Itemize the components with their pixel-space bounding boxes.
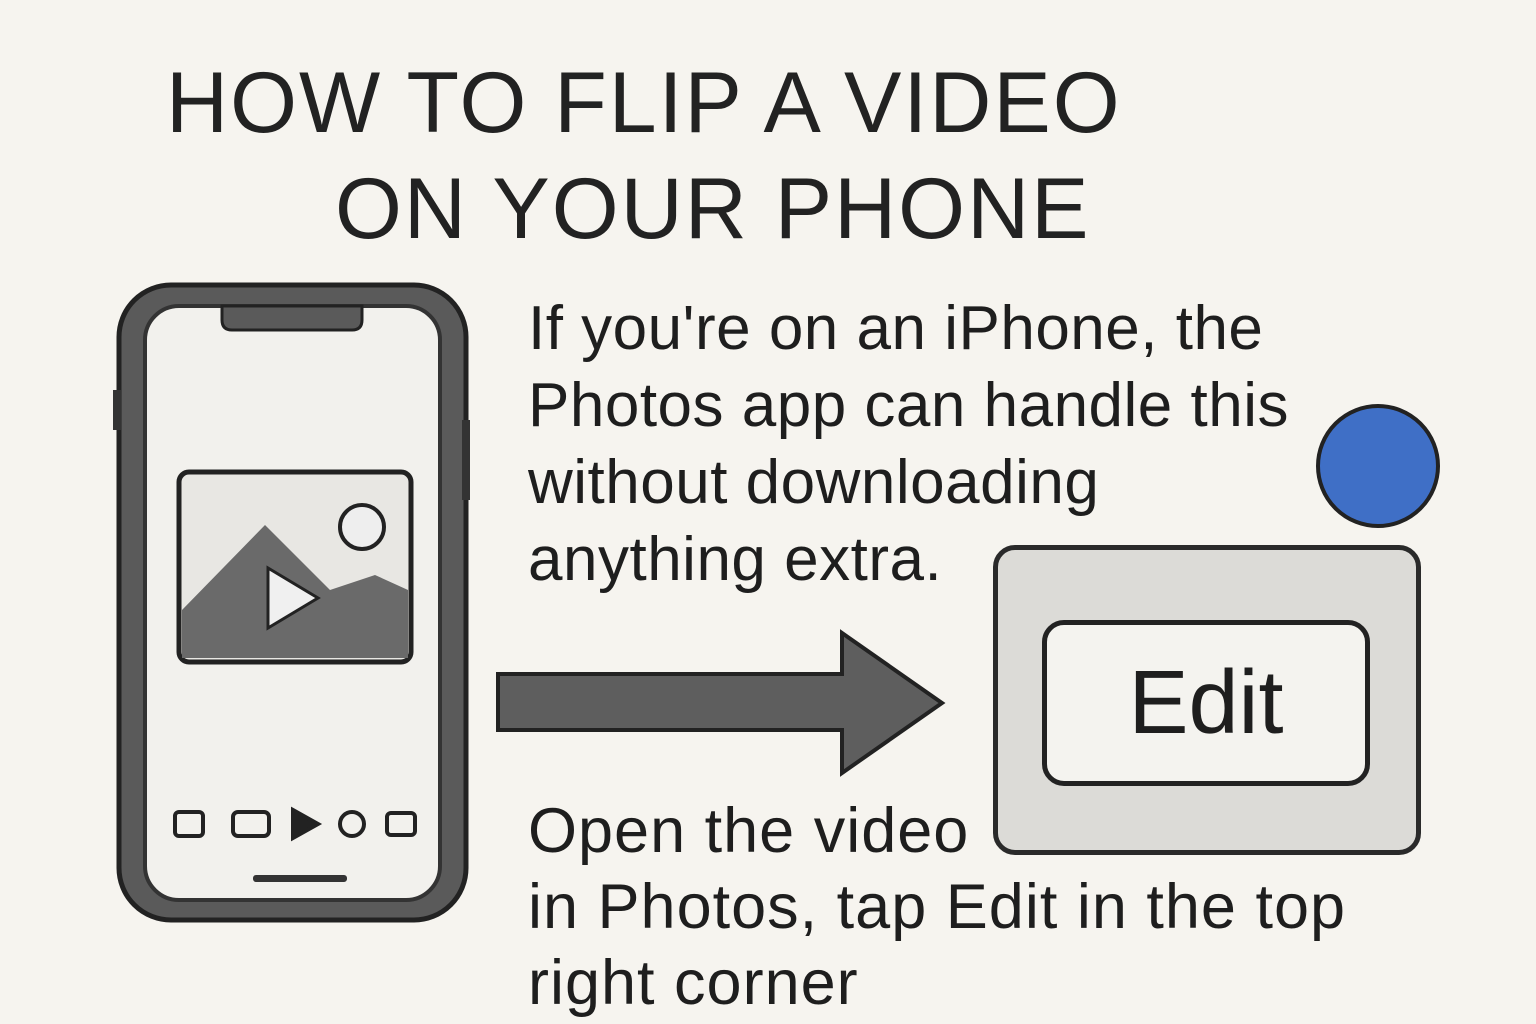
text block: iPhone intro bbox=[528, 294, 1289, 594]
text block: iPhone intro: anything extra. bbox=[528, 525, 942, 594]
text block: instructions: right corner bbox=[528, 948, 859, 1018]
arrow bbox=[496, 629, 946, 777]
panel: edit screen bbox=[993, 545, 1421, 855]
controls bbox=[175, 810, 415, 838]
text block: instructions bbox=[528, 796, 1346, 1018]
edit button bbox=[1042, 620, 1370, 786]
title: HOW TO FLIP A VIDEO bbox=[166, 55, 1122, 151]
edit button: Edit bbox=[1128, 653, 1284, 753]
text block: instructions: Open the video bbox=[528, 796, 969, 866]
title bbox=[166, 55, 1122, 257]
image box bbox=[179, 472, 411, 662]
icon: phone bbox=[113, 282, 470, 922]
text block: instructions: in Photos, tap Edit in the top bbox=[528, 872, 1346, 942]
text block: iPhone intro: If you're on an iPhone, the bbox=[528, 294, 1263, 363]
text block: iPhone intro: without downloading bbox=[528, 448, 1099, 517]
icon: blue circle bbox=[1316, 404, 1440, 528]
title: ON YOUR PHONE bbox=[335, 161, 1091, 257]
text block: iPhone intro: Photos app can handle this bbox=[528, 371, 1289, 440]
